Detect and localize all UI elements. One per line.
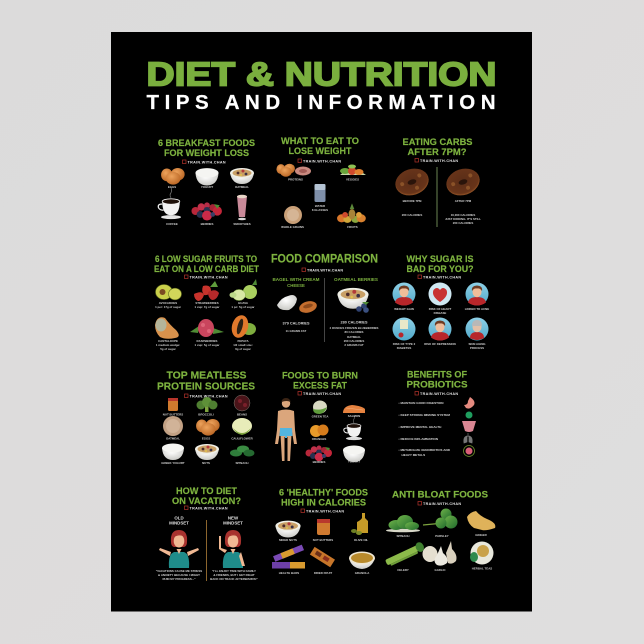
icon: celery: [384, 541, 426, 567]
labels: ORANGES: [312, 437, 326, 441]
labels: 4 OUNCES FROZEN BLUEBERRIES: [330, 326, 379, 330]
labels: SMOOTHIES: [233, 222, 251, 226]
icon: coffee: [344, 415, 362, 440]
icon: coffee: [158, 188, 181, 219]
labels: EGGS: [202, 436, 210, 440]
icon: stomach: [464, 397, 474, 409]
icon: immune: [466, 412, 472, 418]
icon: dried fruit: [310, 547, 335, 567]
labels: NUTS: [202, 461, 210, 465]
heading: [402, 137, 473, 158]
labels: PARSLEY: [435, 534, 449, 538]
labels: PAPAYA: [237, 339, 249, 343]
benefit list: • MAINTAIN GOOD DIGESTION: [398, 401, 444, 405]
icon: beans: [234, 395, 250, 411]
heading: 6 LOW SUGAR FRUITS TO: [155, 254, 257, 265]
heading: WHAT TO EAT TO: [281, 136, 360, 147]
logo: TRAIN.WITH.CHAN: [423, 275, 461, 279]
icon: raspberries: [190, 319, 224, 337]
icon: heart disease: [428, 282, 452, 306]
labels: 6g of sugar: [235, 347, 252, 351]
labels: DRIED FRUIT: [314, 571, 332, 575]
labels: [312, 414, 360, 464]
logo: TRAIN.WITH.CHAN: [420, 159, 458, 163]
icon: avocado: [156, 284, 182, 300]
logo: TRAIN.WITH.CHAN: [303, 392, 341, 396]
panel: eating carbs after 7pm: [392, 137, 483, 227]
mindset labels: NEW: [228, 516, 239, 520]
heading: 6 'HEALTHY' FOODS: [279, 488, 369, 498]
labels: EGGS: [168, 185, 176, 189]
labels: RISK OF HEART: [429, 307, 451, 311]
labels: WHOLE GRAINS: [281, 225, 304, 229]
icon: detox circle: [464, 446, 474, 456]
labels: [281, 178, 359, 229]
panel: food comparison: [271, 254, 379, 347]
labels: AFTER 7PM: [455, 199, 472, 203]
icon: spinach: [386, 515, 420, 532]
icon: cauliflower: [232, 418, 252, 435]
icon: skin aging: [466, 318, 488, 340]
icon: berries: [191, 202, 222, 221]
icon: papaya: [229, 313, 256, 340]
icon: whole grains: [284, 206, 302, 224]
labels: COFFEE: [166, 222, 178, 226]
mindset labels: MINDSET: [169, 520, 189, 526]
labels: LINKED TO ACNE: [465, 307, 489, 311]
labels: [279, 538, 370, 575]
labels: 280 CALORIES: [340, 320, 368, 324]
mindset labels: [169, 516, 243, 526]
logo: TRAIN.WITH.CHAN: [190, 506, 228, 510]
labels: 260 CALORIES: [453, 221, 473, 225]
icon: oranges: [310, 424, 328, 437]
labels: SKIN AGING: [468, 342, 486, 346]
benefit list: • REDUCE INFLAMMATION: [398, 437, 439, 441]
icon: vegetables: [340, 164, 366, 175]
logo: TRAIN.WITH.CHAN: [303, 159, 341, 163]
benefit list: [398, 401, 451, 457]
subheads: BAGEL WITH CREAM: [272, 277, 320, 282]
benefit list: • KEEP STRONG IMMUNE SYSTEM: [398, 413, 450, 417]
icon: granola: [349, 552, 375, 569]
panel: why sugar is bad: [392, 254, 489, 350]
icon: linked to acne: [466, 282, 488, 306]
heading: [154, 254, 259, 275]
panel: low sugar fruits: [154, 254, 259, 351]
panel: meatless protein sources: [157, 370, 255, 465]
labels: OATMEAL: [347, 335, 361, 339]
labels: PROTEINS: [288, 178, 303, 182]
labels: WATER: [315, 204, 326, 208]
panel: 6 breakfast foods: [158, 138, 256, 226]
heading: FOOD COMPARISON: [271, 254, 378, 266]
labels: WEIGHT GAIN: [394, 307, 414, 311]
labels: 200 CALORIES: [344, 339, 364, 343]
labels: 80 CALORIES: [345, 330, 364, 334]
labels: CAULIFLOWER: [231, 436, 254, 440]
logo: TRAIN.WITH.CHAN: [190, 394, 228, 398]
title: TIPS AND INFORMATION: [146, 91, 496, 114]
icon: spinach: [230, 446, 254, 456]
captions: "VACATIONS CAUSE ME STRESS: [156, 569, 202, 573]
heading: FOR WEIGHT LOSS: [164, 148, 250, 159]
heading: EATING CARBS: [402, 137, 473, 148]
icon: fruits: [337, 203, 366, 223]
labels: OATMEAL: [235, 185, 249, 189]
labels: 1 pc: 5g of sugar: [231, 305, 255, 309]
labels: DIABETES: [397, 346, 411, 350]
logo: TRAIN.WITH.CHAN: [307, 268, 343, 272]
benefit list: • METABOLIZE XENOBIOTICS AND: [398, 448, 451, 452]
heading: TOP MEATLESS: [166, 370, 246, 382]
labels: SPINACH: [235, 461, 249, 465]
labels: 1 per: 17g of sugar: [155, 305, 182, 309]
panel: what to eat to lose weight: [276, 136, 366, 229]
icon: smoothie: [237, 195, 247, 220]
labels: [155, 301, 255, 351]
benefit list: HEAVY METALS: [402, 453, 425, 457]
icon: eggs: [161, 168, 185, 185]
icon: proteins: [276, 164, 311, 177]
panel: foods to burn excess fat: [275, 370, 365, 464]
labels: YOGURT: [348, 460, 360, 464]
labels: 1 cup: 5g of sugar: [195, 343, 220, 347]
icon: nut butter: [168, 398, 178, 411]
labels: JUST KIDDING. IT'S STILL: [445, 217, 481, 221]
icon: health bars: [272, 545, 305, 568]
logo: TRAIN.WITH.CHAN: [306, 509, 344, 513]
labels: OLIVE OIL: [354, 538, 368, 542]
title: [146, 56, 496, 114]
captions: "I'LL ENJOY TIME WITH FAMILY: [212, 569, 256, 573]
icon: eggs: [196, 419, 220, 436]
labels: 5g of sugar: [160, 347, 177, 351]
labels: 260 CALORIES: [402, 213, 422, 217]
heading: PROTEIN SOURCES: [157, 380, 255, 392]
labels: 8 GLASSES: [312, 208, 328, 212]
labels: VEGGIES: [346, 178, 359, 182]
labels: NUT BUTTERS: [163, 412, 183, 416]
labels: 2 GRAMS FAT: [344, 343, 364, 347]
heading: [158, 138, 256, 159]
labels: MIXED NUTS: [279, 538, 297, 542]
captions: [156, 569, 259, 581]
labels: GUAVA: [238, 301, 249, 305]
icon: oatmeal: [163, 416, 183, 436]
heading: EXCESS FAT: [293, 380, 347, 392]
labels: HEALTH BARS: [279, 571, 299, 575]
icon: nut butter: [317, 519, 330, 535]
subheads: CHEESE: [287, 283, 305, 288]
panel: how to diet on vacation: [156, 486, 259, 581]
icon: cantaloupe: [155, 317, 179, 339]
icon: garlic: [422, 541, 456, 566]
labels: YOGURT: [201, 185, 213, 189]
labels: [402, 199, 481, 225]
subheads: OATMEAL BERRIES: [334, 277, 378, 282]
labels: PROCESS: [470, 346, 484, 350]
icon: parsley: [423, 508, 458, 528]
labels: AVOCADOES: [159, 301, 177, 305]
heading: [282, 370, 358, 392]
illustration: man: [275, 398, 297, 461]
icon: strawberries: [194, 281, 219, 301]
heading: FOODS TO BURN: [282, 370, 358, 382]
labels: BEFORE 7PM: [403, 199, 422, 203]
heading: HIGH IN CALORIES: [281, 498, 367, 508]
labels: GREEK YOGURT: [161, 461, 185, 465]
labels: CANTALOUPE: [158, 339, 178, 343]
labels: NUT BUTTERS: [313, 538, 333, 542]
labels: RISK OF TYPE 2: [393, 342, 416, 346]
labels: GINGER: [475, 533, 488, 537]
heading: WHY SUGAR IS: [406, 254, 474, 265]
panel: anti bloat foods: [384, 490, 495, 572]
labels: 1/2 small size:: [233, 343, 253, 347]
icon: guava: [230, 279, 257, 300]
heading: [172, 486, 241, 507]
labels: CELERY: [397, 568, 409, 572]
labels: SPINACH: [396, 534, 410, 538]
icon: greek yogurt: [162, 444, 184, 460]
captions: BACK ON TRACK AFTERWARDS!": [210, 577, 259, 581]
illustration: old mindset woman: [159, 530, 199, 568]
labels: [166, 185, 251, 226]
heading: [279, 488, 369, 508]
icon: type 2 diabetes: [392, 318, 416, 340]
logo: TRAIN.WITH.CHAN: [188, 160, 226, 164]
labels: BEANS: [237, 412, 247, 416]
icon: salmon: [343, 405, 365, 413]
labels: 1 medium wedge:: [156, 343, 180, 347]
captions: & ANXIETY BECAUSE I MIGHT: [158, 573, 200, 577]
labels: [393, 307, 489, 350]
icon: lungs: [464, 433, 472, 443]
heading: [406, 370, 468, 390]
labels: GREEN TEA: [312, 414, 329, 418]
labels: [396, 533, 492, 572]
illustration: new mindset woman: [219, 530, 245, 568]
captions: RUIN MY PROGRESS...": [162, 577, 196, 581]
icon: depression: [428, 318, 452, 340]
heading: EAT ON A LOW CARB DIET: [154, 264, 259, 275]
icon: oatmeal with blueberries: [337, 288, 369, 313]
heading: [281, 136, 360, 157]
heading: PROBIOTICS: [406, 380, 468, 390]
subheads: [272, 277, 378, 288]
heading: LOSE WEIGHT: [288, 146, 352, 157]
heading: [157, 370, 255, 392]
icon: intestine: [462, 421, 476, 432]
labels: BERRIES: [313, 460, 325, 464]
heading: [406, 254, 474, 275]
labels: [161, 412, 254, 465]
labels: BERRIES: [201, 222, 213, 226]
captions: & FRIENDS, BUT I GET RIGHT: [213, 573, 255, 577]
panel: benefits of probiotics: [398, 370, 476, 457]
title: DIET & NUTRITION: [146, 56, 496, 92]
heading: AFTER 7PM?: [408, 147, 467, 158]
labels: DISEASE: [434, 311, 446, 315]
icon: yogurt: [195, 168, 219, 185]
icon: nuts: [195, 444, 219, 460]
logo: TRAIN.WITH.CHAN: [423, 502, 461, 506]
labels: GRANOLA: [355, 571, 370, 575]
icon: berries: [306, 446, 332, 461]
icon: bagel with cream cheese: [277, 295, 318, 315]
logo: TRAIN.WITH.CHAN: [190, 275, 228, 279]
heading: ANTI BLOAT FOODS: [392, 490, 489, 500]
icon: yogurt: [343, 446, 365, 462]
icon: oatmeal: [230, 168, 254, 184]
labels: RASPBERRIES: [197, 339, 218, 343]
icon: green tea: [313, 400, 327, 414]
icon: donut after: [443, 164, 483, 200]
logo: TRAIN.WITH.CHAN: [420, 392, 458, 396]
heading: 6 BREAKFAST FOODS: [158, 138, 256, 149]
labels: STRAWBERRIES: [195, 301, 219, 305]
benefit list: • IMPROVE MENTAL HEALTH: [398, 425, 442, 429]
labels: 1 cup: 7g of sugar: [195, 305, 220, 309]
panel: healthy foods high in calories: [272, 488, 375, 575]
mindset labels: OLD: [174, 516, 184, 520]
icon: water glass: [314, 184, 326, 202]
heading: BENEFITS OF: [407, 370, 467, 380]
labels: RISK OF DEPRESSION: [424, 342, 456, 346]
labels: SALMON: [348, 414, 360, 418]
icon: herbal teas: [470, 542, 494, 564]
labels: 11 GRAMS FAT: [286, 329, 307, 333]
labels: COFFEE: [348, 437, 360, 441]
labels: FRUITS: [347, 225, 358, 229]
labels: 16,000 CALORIES: [451, 213, 475, 217]
heading: HOW TO DIET: [176, 486, 237, 497]
icon: mixed nuts: [275, 521, 301, 537]
mindset labels: MINDSET: [223, 520, 243, 526]
labels: [282, 320, 379, 347]
labels: GARLIC: [434, 568, 446, 572]
labels: HERBAL TEAS: [472, 566, 492, 570]
icon: ginger: [467, 511, 495, 530]
labels: 379 CALORIES: [282, 322, 310, 326]
icon: weight gain: [392, 282, 416, 306]
heading: ON VACATION?: [172, 496, 241, 507]
labels: BROCCOLI: [198, 412, 214, 416]
icon: donut before: [392, 164, 432, 200]
icon: olive oil: [351, 513, 368, 535]
icon: broccoli: [196, 397, 218, 412]
labels: OATMEAL: [166, 436, 180, 440]
heading: BAD FOR YOU?: [406, 264, 474, 275]
